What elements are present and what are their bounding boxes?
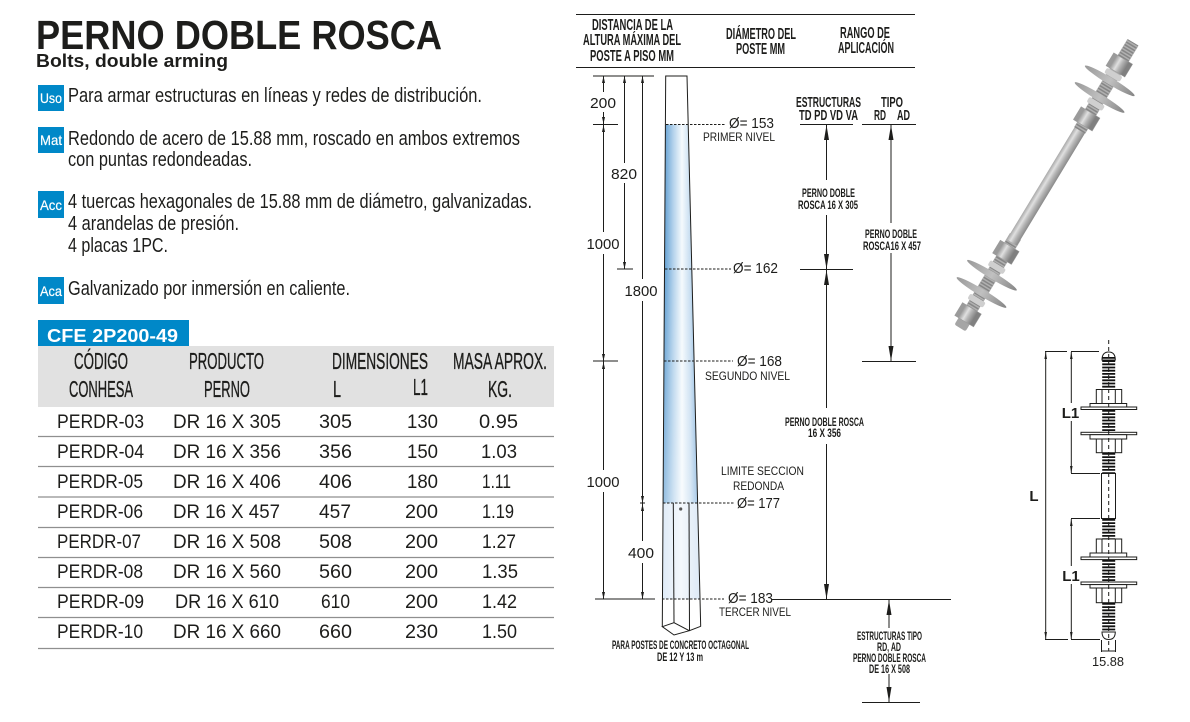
label: 16 x 457: ROSCA16 X 457 bbox=[863, 239, 921, 253]
top threaded end bbox=[1081, 352, 1137, 473]
row PERDR-04: 1.03 bbox=[481, 442, 517, 463]
row PERDR-06: 457 bbox=[319, 502, 351, 523]
block: acabado bbox=[38, 277, 350, 304]
table header: CÓDIGO bbox=[74, 348, 128, 374]
row PERDR-07: DR 16 X 508 bbox=[173, 532, 281, 553]
header: distancia: DISTANCIA DE LA bbox=[592, 17, 673, 34]
header: diametro: DIÁMETRO DEL bbox=[726, 24, 796, 43]
text: material: Redondo de acero de 15.88 mm, roscado en ambos extremos bbox=[68, 128, 520, 150]
row PERDR-09 bbox=[57, 592, 517, 613]
diameter 177: Ø= 177 bbox=[737, 495, 780, 512]
block: accesorios bbox=[38, 191, 532, 257]
center axis bbox=[1108, 340, 1110, 651]
text: accesorios: 4 arandelas de presión. bbox=[68, 213, 239, 235]
row PERDR-05: DR 16 X 406 bbox=[173, 472, 281, 493]
primer nivel: PRIMER NIVEL bbox=[703, 130, 775, 144]
technical drawing bbox=[1029, 340, 1137, 669]
text: uso: Para armar estructuras en líneas y redes de distribución. bbox=[68, 85, 482, 107]
table bbox=[38, 320, 554, 648]
pole note: DE 12 Y 13 m bbox=[657, 652, 703, 664]
row PERDR-03: DR 16 X 305 bbox=[173, 412, 281, 433]
row PERDR-06: DR 16 X 457 bbox=[173, 502, 280, 523]
row PERDR-10 bbox=[57, 622, 517, 643]
table header: MASA APROX. bbox=[453, 348, 547, 374]
row PERDR-10: DR 16 X 660 bbox=[173, 622, 281, 643]
range lines bbox=[772, 124, 951, 702]
limite seccion redonda: LIMITE SECCION bbox=[721, 464, 804, 478]
row PERDR-05: PERDR-05 bbox=[57, 472, 143, 493]
limite seccion redonda: REDONDA bbox=[733, 479, 784, 493]
header: diametro bbox=[726, 24, 796, 58]
badge: material: Mat bbox=[40, 132, 62, 148]
row PERDR-09: 610 bbox=[321, 592, 350, 613]
header: diametro: POSTE MM bbox=[736, 41, 785, 58]
row PERDR-10: 230 bbox=[405, 622, 438, 643]
header: rango bbox=[838, 25, 894, 57]
badge: acabado bbox=[38, 277, 64, 304]
pole bbox=[662, 76, 701, 635]
row PERDR-10: 1.50 bbox=[482, 622, 517, 643]
row PERDR-06: 1.19 bbox=[482, 502, 514, 523]
row PERDR-10: 660 bbox=[319, 622, 352, 643]
dimension L1 upper: L1 bbox=[1062, 405, 1079, 422]
row PERDR-05: 1.11 bbox=[482, 472, 511, 493]
text: acabado: Galvanizado por inmersión en caliente. bbox=[68, 278, 350, 300]
table header: DIMENSIONES bbox=[332, 348, 428, 374]
header: distancia bbox=[583, 17, 681, 65]
row PERDR-03: 130 bbox=[407, 412, 438, 433]
text: accesorios bbox=[68, 191, 532, 257]
row PERDR-07 bbox=[57, 532, 516, 553]
diameter 153: Ø= 153 bbox=[729, 115, 774, 132]
header: rango: RANGO DE bbox=[840, 25, 890, 42]
label: 16 x 305 bbox=[798, 186, 858, 212]
application range bbox=[772, 94, 951, 702]
heading: tipo: RD bbox=[874, 107, 886, 124]
label: 16 x 508: ESTRUCTURAS TIPO bbox=[857, 629, 922, 643]
table header bbox=[38, 346, 554, 407]
heading: estructuras: ESTRUCTURAS bbox=[796, 94, 861, 111]
label: 16 x 356 bbox=[785, 415, 864, 440]
label 1800: 1800 bbox=[624, 283, 658, 300]
row PERDR-08: 560 bbox=[319, 562, 352, 583]
label 200: 200 bbox=[590, 95, 616, 112]
row PERDR-04: PERDR-04 bbox=[57, 442, 144, 463]
row PERDR-08 bbox=[57, 562, 518, 583]
row PERDR-07: 1.27 bbox=[482, 532, 516, 553]
row PERDR-03: 0.95 bbox=[479, 412, 518, 433]
text: material: con puntas redondeadas. bbox=[68, 149, 252, 171]
dimension 15.88 bbox=[1092, 640, 1124, 669]
dimension L1 lower: L1 bbox=[1062, 568, 1080, 585]
heading: estructuras: TD PD VD VA bbox=[799, 107, 858, 124]
label: 16 x 508: PERNO DOBLE ROSCA bbox=[853, 651, 926, 665]
row PERDR-09: 200 bbox=[405, 592, 438, 613]
label 1000 lower: 1000 bbox=[586, 474, 620, 491]
label: 16 x 356: PERNO DOBLE ROSCA bbox=[785, 415, 864, 429]
table tab: CFE bbox=[38, 320, 189, 346]
label: 16 x 356: 16 X 356 bbox=[808, 426, 841, 440]
row PERDR-03: 305 bbox=[319, 412, 352, 433]
header: distancia: ALTURA MÁXIMA DEL bbox=[583, 30, 681, 49]
dimension L1 upper bbox=[1062, 352, 1100, 474]
row PERDR-09: 1.42 bbox=[482, 592, 517, 613]
pole note: PARA POSTES DE CONCRETO OCTAGONAL bbox=[612, 640, 749, 652]
row PERDR-04 bbox=[57, 442, 517, 463]
block: uso bbox=[38, 85, 482, 111]
diagram header bbox=[576, 14, 915, 68]
subtitle: Bolts, double arming bbox=[36, 50, 228, 71]
table header: L1 bbox=[413, 374, 428, 400]
range arrows bbox=[824, 125, 894, 702]
tercer nivel: TERCER NIVEL bbox=[719, 605, 791, 619]
label: 16 x 305: ROSCA 16 X 305 bbox=[798, 198, 858, 212]
row PERDR-06: PERDR-06 bbox=[57, 502, 143, 523]
table tab: CFE: CFE 2P200-49 bbox=[47, 325, 178, 346]
badge: material bbox=[38, 127, 64, 153]
heading: tipo: AD bbox=[897, 107, 910, 124]
row PERDR-03 bbox=[57, 412, 518, 433]
row PERDR-07: 508 bbox=[319, 532, 352, 553]
text: accesorios: 4 tuercas hexagonales de 15.88 mm de diámetro, galvanizadas. bbox=[68, 191, 532, 213]
dimension lines: left bbox=[586, 76, 658, 599]
dimension L1 lower bbox=[1062, 518, 1100, 640]
diameter 168: Ø= 168 bbox=[737, 353, 782, 370]
pole note bbox=[612, 640, 749, 664]
row PERDR-07: PERDR-07 bbox=[57, 532, 141, 553]
row PERDR-05: 406 bbox=[319, 472, 352, 493]
row PERDR-04: 150 bbox=[407, 442, 438, 463]
row PERDR-08: 1.35 bbox=[482, 562, 518, 583]
badge: uso bbox=[38, 85, 64, 111]
label: 16 x 457: PERNO DOBLE bbox=[865, 227, 917, 241]
table header: KG. bbox=[488, 376, 512, 402]
limite seccion redonda bbox=[721, 464, 804, 493]
row PERDR-04: 356 bbox=[319, 442, 352, 463]
table header: PRODUCTO bbox=[189, 348, 264, 374]
label: 16 x 508 bbox=[853, 629, 926, 676]
title: PERNO DOBLE ROSCA bbox=[36, 12, 442, 58]
row PERDR-06: 200 bbox=[405, 502, 438, 523]
row PERDR-09: DR 16 X 610 bbox=[175, 592, 279, 613]
label 400: 400 bbox=[628, 545, 654, 562]
table header: L bbox=[333, 376, 341, 402]
heading: estructuras bbox=[796, 94, 861, 124]
row PERDR-05 bbox=[57, 472, 511, 493]
row PERDR-09: PERDR-09 bbox=[57, 592, 144, 613]
row PERDR-10: PERDR-10 bbox=[57, 622, 143, 643]
dimension 15.88: 15.88 bbox=[1092, 655, 1124, 669]
row PERDR-08: DR 16 X 560 bbox=[173, 562, 281, 583]
label: 16 x 457 bbox=[863, 227, 921, 253]
badge: acabado: Aca bbox=[40, 283, 62, 299]
block: material bbox=[38, 127, 520, 171]
label: 16 x 305: PERNO DOBLE bbox=[802, 186, 855, 200]
badge: accesorios bbox=[38, 191, 64, 218]
text: material bbox=[68, 128, 520, 171]
row PERDR-08: PERDR-08 bbox=[57, 562, 143, 583]
diameter levels bbox=[662, 115, 804, 619]
text: accesorios: 4 placas 1PC. bbox=[68, 235, 168, 257]
plain rod bbox=[1102, 474, 1116, 518]
label 820: 820 bbox=[611, 166, 637, 183]
diameter 162: Ø= 162 bbox=[733, 260, 778, 277]
row PERDR-07: 200 bbox=[405, 532, 438, 553]
heading: tipo bbox=[874, 94, 910, 124]
bottom threaded end bbox=[1081, 519, 1137, 640]
dimension L: L bbox=[1029, 488, 1039, 505]
table row lines bbox=[38, 436, 554, 648]
badge: uso: Uso bbox=[40, 90, 62, 106]
diameter 183: Ø= 183 bbox=[728, 590, 773, 607]
table header: CONHESA bbox=[69, 376, 133, 402]
segundo nivel: SEGUNDO NIVEL bbox=[705, 369, 790, 383]
row PERDR-08: 200 bbox=[405, 562, 438, 583]
row PERDR-06 bbox=[57, 502, 514, 523]
header: rango: APLICACIÓN bbox=[838, 38, 894, 57]
heading: tipo: TIPO bbox=[881, 94, 903, 111]
row PERDR-05: 180 bbox=[407, 472, 438, 493]
row PERDR-03: PERDR-03 bbox=[57, 412, 144, 433]
table header: PERNO bbox=[204, 376, 250, 402]
label: 16 x 508: DE 16 X 508 bbox=[869, 662, 910, 676]
badge: accesorios: Acc bbox=[40, 197, 62, 213]
label 1000 upper: 1000 bbox=[586, 236, 620, 253]
bolt illustration bbox=[935, 27, 1158, 343]
row PERDR-04: DR 16 X 356 bbox=[173, 442, 281, 463]
label: 16 x 508: RD, AD bbox=[877, 640, 901, 654]
header: distancia: POSTE A PISO MM bbox=[590, 48, 674, 65]
